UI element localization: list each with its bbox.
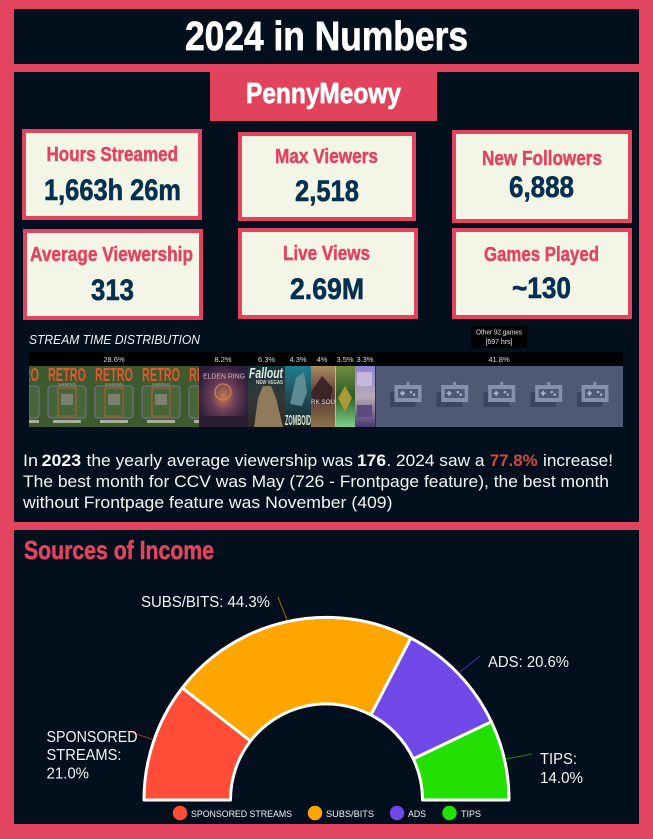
chart: income half-donut [46, 594, 583, 800]
tile: dark souls: RK SOU [311, 400, 335, 406]
tile: retro gaming: GAMING [58, 382, 76, 386]
chart legend: SUBS/BITS [326, 809, 374, 820]
heading: stream time distribution: STREAM TIME DISTRIBUTION [29, 332, 201, 347]
tooltip: other 92 games [471, 326, 527, 350]
stat card: max viewers: Max Viewers [275, 146, 378, 168]
segment: subs/bits [182, 617, 411, 741]
text block: yearly summary: without Frontpage feature was November (409) [22, 493, 393, 512]
percentage labels [103, 355, 510, 364]
stat card: average viewership: 313 [91, 274, 134, 307]
tile: other games placeholder [375, 366, 623, 427]
tile: city game art [355, 366, 375, 427]
streamer name banner [210, 72, 437, 121]
tooltip: other 92 games: [697 hrs] [486, 339, 513, 346]
icon: controller [437, 382, 468, 407]
leader lines [127, 597, 532, 759]
text block: yearly summary: 77.8% [490, 451, 538, 470]
text block: yearly summary [22, 451, 613, 512]
data label: tips: 14.0% [540, 770, 583, 787]
segment: tips [413, 722, 509, 800]
data label: tips [540, 751, 583, 787]
stat card: live views [240, 230, 416, 317]
tile: dark souls [311, 366, 335, 427]
data label: sponsored streams: 21.0% [46, 766, 89, 782]
heading: sources of income: Sources of Income [24, 535, 214, 565]
percentage labels: 4% [317, 355, 328, 364]
tile: retro gaming: RETRO [142, 365, 180, 385]
tile: project zomboid [285, 366, 311, 429]
title: 2024 in Numbers [185, 13, 468, 59]
stat card: average viewership: Average Viewership [30, 244, 193, 266]
tile: fallout new vegas: Fallout [249, 365, 284, 382]
tile: retro gaming: RETRO [48, 365, 86, 385]
data label: sponsored streams: SPONSORED [46, 729, 138, 746]
stat card: hours streamed: Hours Streamed [46, 144, 178, 166]
percentage labels: 6.3% [258, 355, 275, 364]
stat card: hours streamed: 1,663h 26m [44, 174, 181, 207]
tile: retro gaming: GAMING [152, 382, 170, 386]
tile: elden ring: ELDEN RING [203, 372, 245, 380]
data label: ads: ADS: 20.6% [488, 654, 569, 671]
icon: controller [577, 382, 608, 407]
text block: yearly summary: 176 [357, 451, 386, 470]
stat card: max viewers: 2,518 [295, 175, 359, 208]
stat card: new followers [454, 132, 630, 221]
text block: yearly summary: . [386, 451, 391, 470]
stat card: games played: ~130 [512, 272, 571, 305]
tooltip: other 92 games: Other 92 games [476, 330, 522, 336]
tile: retro gaming: RETRO [189, 365, 227, 385]
segment: ads [371, 638, 491, 759]
tile: elden ring [199, 366, 248, 427]
tile: retro gaming: RETRO [95, 365, 133, 385]
chart legend: SPONSORED STREAMS [191, 809, 292, 820]
tile: retro gaming: RETRO [1, 365, 39, 385]
percentage labels: 4.3% [289, 355, 307, 364]
chart: stream time distribution bar [1, 352, 623, 429]
text block: yearly summary: 2023 [42, 451, 81, 470]
chart legend: ADS [408, 809, 426, 820]
icon: controller [390, 382, 422, 407]
stat card: live views: 2.69M [290, 273, 364, 306]
data label: subs/bits: SUBS/BITS: 44.3% [141, 594, 270, 611]
icon: controller [531, 382, 562, 407]
stat card: live views: Live Views [283, 243, 370, 265]
stat card: average viewership [25, 231, 201, 318]
tile: fallout new vegas [248, 365, 285, 427]
text block: yearly summary: the yearly average viewership was [86, 451, 353, 470]
panel: title [14, 9, 639, 64]
stat card: hours streamed [24, 131, 200, 218]
panel: sources of income [14, 530, 639, 824]
percentage labels: 3.3% [356, 355, 374, 364]
tile: fallout new vegas: NEW VEGAS [256, 380, 284, 386]
chart legend [173, 806, 481, 820]
stat card: max viewers [240, 134, 414, 219]
text block: yearly summary: The best month for CCV was May (726 - Frontpage feature), the best month [23, 472, 609, 491]
percentage labels: 3.5% [336, 355, 354, 364]
text block: yearly summary: 2024 saw a [396, 451, 485, 470]
chart legend: TIPS [461, 809, 481, 820]
chart: stream time distribution bar: ZOMBOID [285, 412, 311, 429]
data label: sponsored streams [46, 729, 138, 782]
tile: green game art [335, 366, 355, 427]
data label: sponsored streams: STREAMS: [46, 747, 122, 764]
icon: controller [484, 382, 515, 407]
stat card: games played: Games Played [484, 244, 599, 266]
stat card: new followers: 6,888 [509, 171, 574, 204]
percentage labels: 28.6% [103, 355, 125, 364]
panel: stats [1, 72, 639, 522]
percentage labels: 8.2% [214, 355, 232, 364]
stat card: games played [454, 230, 630, 317]
tile: retro gaming [29, 366, 199, 427]
text block: yearly summary: In [23, 451, 38, 470]
tile: retro gaming: GAMING [11, 382, 29, 386]
data label: tips: TIPS: [540, 751, 577, 768]
streamer name banner: PennyMeowy [246, 78, 401, 110]
segment: sponsored streams [144, 688, 250, 800]
text block: yearly summary: increase! [543, 451, 613, 470]
stat card: new followers: New Followers [482, 148, 602, 170]
tile: retro gaming: GAMING [105, 382, 123, 386]
percentage labels: 41.8% [488, 355, 510, 364]
